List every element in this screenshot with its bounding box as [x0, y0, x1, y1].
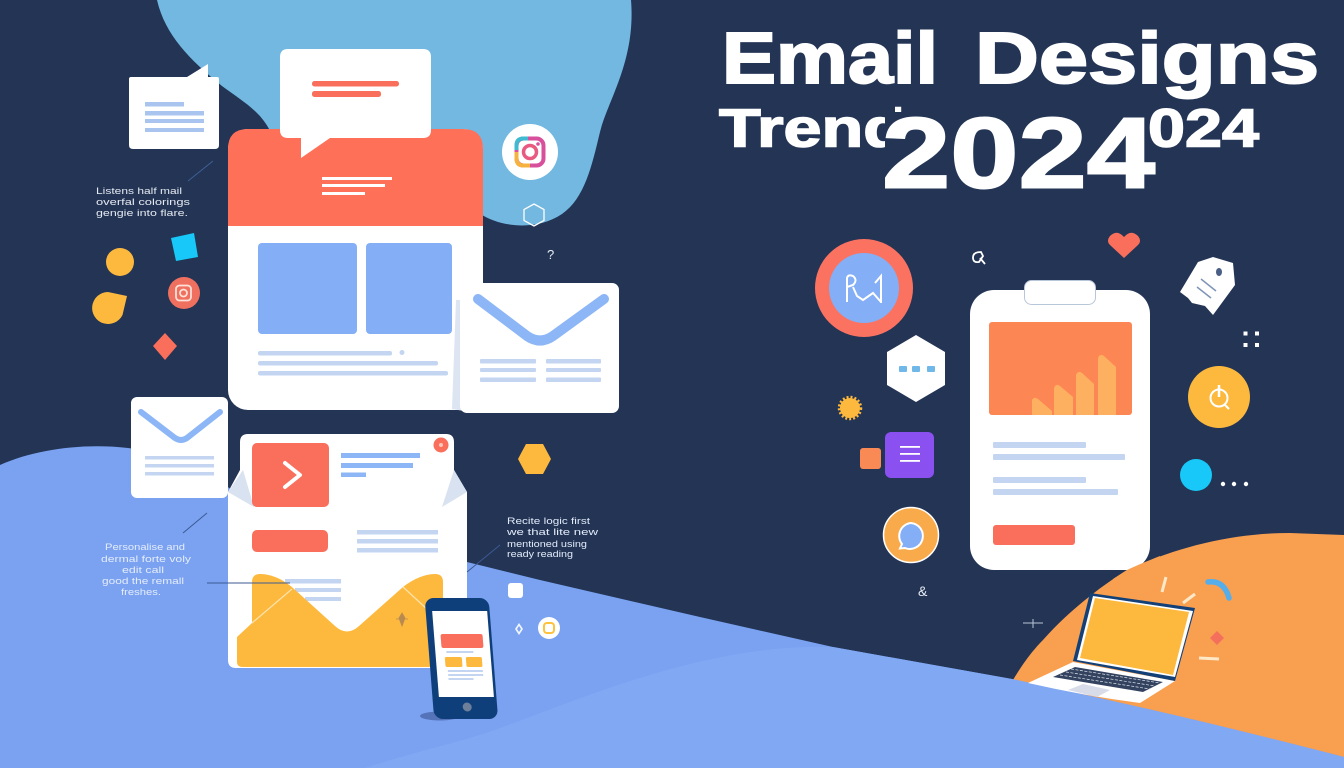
text block: left note: [96, 186, 190, 219]
chart panel: [989, 322, 1132, 415]
icon: white hexagon: [887, 335, 945, 402]
text block: left callout: Personalise and: [105, 542, 185, 553]
icon: sun: [839, 397, 861, 419]
text block: left note: gengie into flare.: [96, 208, 188, 219]
icon: chat badge: [884, 508, 938, 562]
title word: Designs: Designs: [975, 19, 1319, 99]
smartphone: [420, 598, 498, 720]
icon: yellow circle: [106, 248, 134, 276]
header lines: [322, 177, 392, 195]
text block: left callout: freshes.: [121, 587, 161, 598]
icon: small sparkle: [515, 623, 523, 635]
open envelope: [228, 434, 467, 668]
leader line: left note: [188, 161, 213, 181]
icon: four dots: [1244, 332, 1259, 347]
icon: purple menu tile: [885, 432, 934, 478]
icon: power badge: [1188, 366, 1250, 428]
icon: instagram badge: [502, 124, 558, 180]
yellow envelope front: [237, 574, 443, 667]
text lines: [285, 530, 438, 601]
video block: [252, 443, 329, 507]
leader lines: envelope callouts: [183, 513, 500, 583]
title big year: 2024: [882, 98, 1155, 210]
text block: left callout: [101, 542, 191, 598]
note card: top left: [129, 64, 219, 149]
bar chart: [1032, 355, 1116, 415]
title: [718, 30, 1317, 190]
light blue blob: [157, 0, 632, 225]
image block right: [366, 243, 452, 334]
icon: coral ring badge: [815, 239, 913, 337]
phone shadow: [420, 712, 460, 720]
flap creases: [252, 587, 428, 623]
text block: right callout: [506, 516, 598, 560]
body lines: [258, 350, 448, 376]
home button: [462, 702, 472, 712]
icon: cyan circle: [1180, 459, 1212, 491]
text block: left callout: edit call: [122, 565, 164, 576]
decorative ticks: laptop: [1162, 577, 1219, 659]
clip tab: [1024, 280, 1096, 304]
button: [252, 530, 328, 552]
card header: [228, 129, 483, 226]
envelope flaps: [228, 470, 254, 507]
keyboard: [1053, 667, 1163, 692]
button: [993, 525, 1075, 545]
main email card: [228, 129, 483, 410]
text block: left callout: dermal forte voly: [101, 554, 191, 565]
headline lines: [341, 453, 420, 477]
blue wave: [0, 446, 1344, 768]
text lines: [993, 442, 1125, 495]
text block: left note: overfal colorings: [96, 197, 190, 208]
title small year: 024: [1148, 98, 1259, 158]
orange hill overlap: [1113, 556, 1160, 590]
hexagon: yellow: [518, 444, 551, 474]
icon: heart: [1108, 233, 1140, 258]
icon: blue arc: [1208, 582, 1229, 598]
text block: right callout: ready reading: [507, 549, 573, 560]
icon: three dots: [1221, 482, 1248, 486]
icon: white square: [508, 583, 523, 598]
icon: yellow teardrop: [92, 292, 127, 324]
speech bubble: [280, 49, 431, 158]
lighter wave layer: [365, 647, 1344, 768]
orange hill: [1013, 533, 1344, 768]
notification dot: [434, 438, 448, 452]
phone screen: [432, 611, 494, 697]
title line: Trend: Trend: [719, 98, 905, 158]
icon: magnifier glyph: [973, 252, 985, 264]
icon: ampersand glyph: &: [918, 583, 928, 599]
text block: right callout: mentioned using: [507, 539, 587, 550]
envelope card right: [452, 283, 619, 413]
icon: clock badge: [538, 617, 560, 639]
icon: price tag: [1180, 257, 1235, 315]
icon: cyan square: [171, 233, 198, 261]
text block: right callout: Recite logic first: [507, 516, 590, 527]
icon: question mark: ?: [547, 247, 554, 262]
icon: small instagram: [168, 277, 200, 309]
trackpad: [1068, 684, 1110, 697]
icon: coral spark: [1210, 631, 1224, 645]
small envelope card: [131, 397, 228, 498]
title word: Email: Email: [722, 19, 938, 99]
phone banner: [440, 634, 484, 648]
icon: hexagon outline: [524, 204, 544, 226]
phone tiles: [445, 657, 463, 667]
text block: right callout: we that lite new: [506, 527, 598, 538]
icon: small star: [396, 613, 408, 626]
image block left: [258, 243, 357, 334]
icon: plus: [1023, 619, 1043, 628]
mobile email card: [970, 280, 1150, 570]
icon: chevron: [285, 463, 300, 487]
text block: left callout: good the remall: [102, 576, 184, 587]
icon: orange square: [860, 448, 881, 469]
text block: left note: Listens half mail: [96, 186, 182, 197]
icon: coral diamond: [153, 333, 177, 360]
laptop base: [1028, 662, 1175, 703]
laptop: [1028, 593, 1195, 703]
laptop screen: [1073, 593, 1195, 681]
